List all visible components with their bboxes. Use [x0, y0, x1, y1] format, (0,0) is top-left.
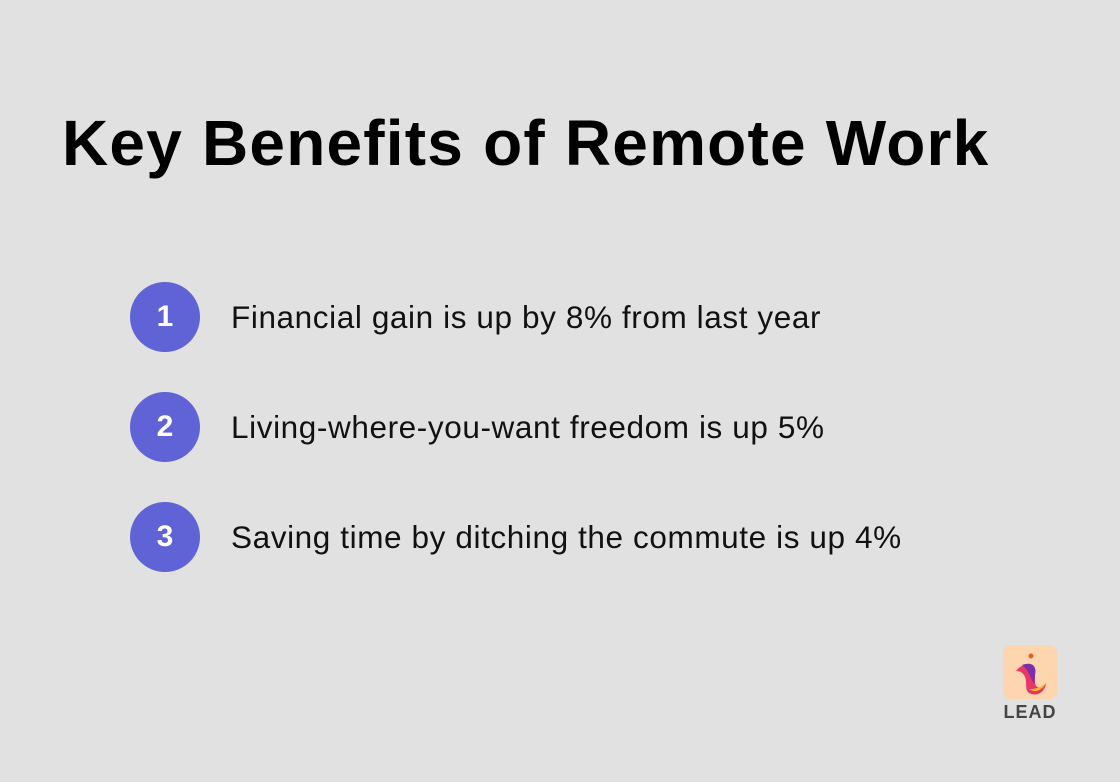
item 1: 1	[157, 300, 173, 333]
title: Key Benefits of Remote Work	[62, 107, 989, 179]
item 2: 2	[157, 410, 173, 443]
item 3: Saving time by ditching the commute is up 4%	[231, 519, 902, 555]
item 2: Living-where-you-want freedom is up 5%	[231, 409, 825, 445]
item 3	[130, 502, 902, 572]
item 3: 3	[157, 520, 173, 553]
item 2	[130, 392, 825, 462]
item 1	[130, 282, 821, 352]
item 1: Financial gain is up by 8% from last year	[231, 299, 821, 335]
logo: LEAD	[1004, 702, 1056, 722]
logo	[1003, 645, 1057, 722]
